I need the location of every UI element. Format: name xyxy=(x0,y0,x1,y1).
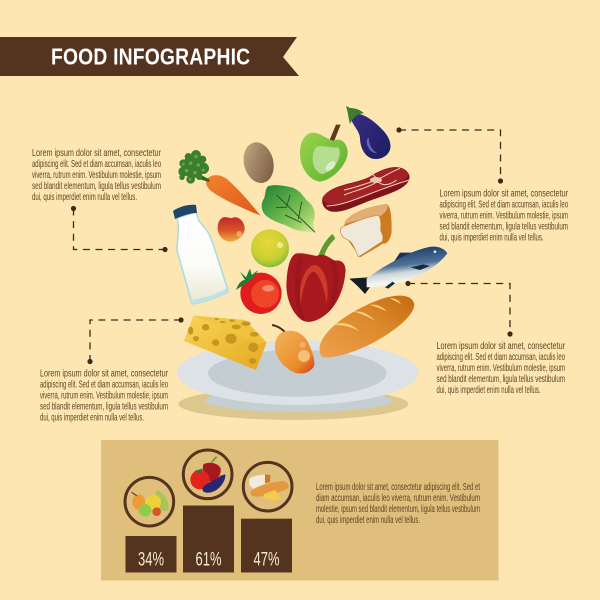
food: lime xyxy=(251,229,289,267)
icon: bread and cheese circle xyxy=(243,462,292,511)
text block: lower left xyxy=(40,368,168,424)
text block: upper left: dui, quis imperdiet enim nulla vel tellus. xyxy=(32,192,137,203)
text block: lower left: dui, quis imperdiet enim nulla vel tellus. xyxy=(40,412,144,424)
text block: lower left: sed blandit elementum, ligula tellus vestibulum xyxy=(40,402,168,412)
icon: vegetables circle xyxy=(183,450,232,499)
text block: statistics panel: Lorem ipsum dolor sit amet, consectetur adipiscing elit. Sed et xyxy=(316,482,480,493)
connector: lower left xyxy=(87,317,184,364)
food: eggplant xyxy=(346,106,390,159)
food: baguette xyxy=(320,296,414,357)
panel: statistics xyxy=(101,440,498,580)
text block: statistics panel: molestie, ipsum sed blandit elementum, ligula tellus vestibulum xyxy=(316,504,480,515)
food: bread xyxy=(340,204,392,257)
bar chart: 34% xyxy=(126,536,176,572)
bottle cap xyxy=(173,205,197,219)
text block: statistics panel: diam accumsan, iaculis leo viverra, rutrum enim. Vestibulum xyxy=(316,493,480,504)
connector: lower right xyxy=(405,281,513,337)
food: milk bottle xyxy=(173,205,228,304)
text block: upper left: Lorem ipsum dolor sit amet, consectetur xyxy=(32,148,161,159)
food: peach xyxy=(272,325,314,374)
food: carrot xyxy=(178,150,261,216)
text block: lower right xyxy=(436,341,565,396)
text block: upper left: sed blandit elementum, ligula tellus vestibulum xyxy=(32,181,161,192)
food: cheese xyxy=(184,316,267,370)
text block: statistics panel xyxy=(316,482,480,526)
text block: lower left: Lorem ipsum dolor sit amet, consectetur xyxy=(40,368,168,380)
bar chart: 61%: 61% xyxy=(196,550,222,570)
text block: upper left: viverra, rutrum enim. Vestibulum molestie, ipsum xyxy=(32,170,161,181)
bar chart: 47% xyxy=(241,519,292,572)
text block: upper left xyxy=(32,148,161,203)
connector: upper left xyxy=(71,206,168,252)
food: fish xyxy=(349,247,447,294)
text block: lower left: viverra, rutrum enim. Vestibulum molestie, ipsum xyxy=(40,390,168,402)
food: potato xyxy=(239,139,278,186)
food: red apple xyxy=(218,217,245,242)
bar chart: 61% xyxy=(183,506,234,572)
text block: lower left: adipiscing elit. Sed et diam accumsan, iaculis leo xyxy=(40,380,168,390)
text block: upper right xyxy=(440,188,568,244)
bar chart: 34%: 34% xyxy=(138,550,164,570)
food: green apple xyxy=(300,125,348,182)
connector: upper right xyxy=(396,127,503,184)
title: FOOD INFOGRAPHIC xyxy=(51,45,250,70)
bar chart: 47%: 47% xyxy=(254,550,280,570)
icon: fruit circle xyxy=(125,477,174,526)
food: tomato xyxy=(236,268,282,314)
title banner xyxy=(0,37,299,76)
text block: statistics panel: dui, quis imperdiet enim nulla vel tellus. xyxy=(316,515,420,526)
food: lettuce xyxy=(262,185,315,232)
food: meat xyxy=(322,167,410,212)
plate xyxy=(177,340,418,420)
food: bell pepper xyxy=(286,234,346,322)
text block: upper left: adipiscing elit. Sed et diam accumsan, iaculis leo xyxy=(32,159,161,170)
